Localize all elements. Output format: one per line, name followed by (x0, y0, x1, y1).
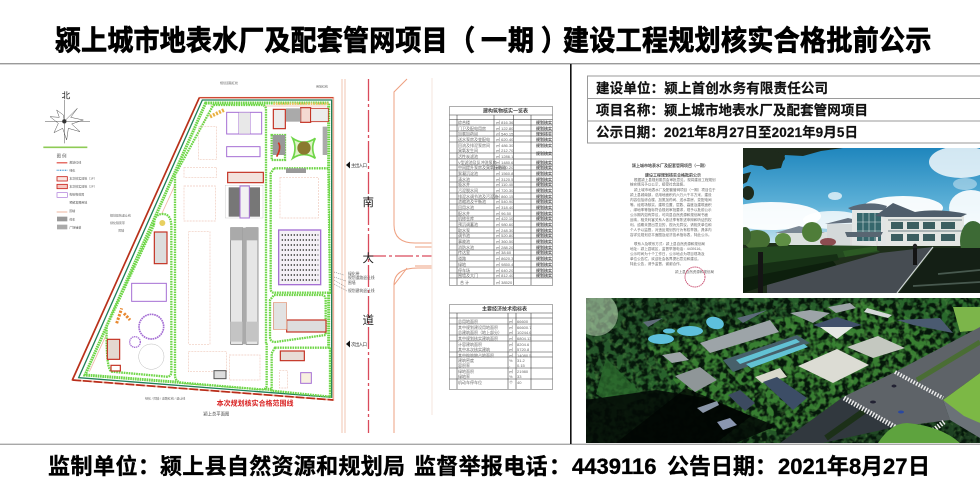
table: technical indicators: ㎡ (509, 318, 513, 324)
compass rose: 北 (62, 90, 71, 100)
plan caption: 颍上总平面图 (203, 411, 229, 418)
panel: road: 道 (362, 313, 374, 327)
table: building list: 规划核实 (536, 130, 552, 136)
table: building list (450, 106, 552, 286)
table rows: 浓缩池及平衡池 (458, 198, 486, 204)
plaza road (767, 247, 933, 293)
legend: 绿化 (69, 168, 75, 173)
table rows: 清水池 (458, 176, 470, 182)
table: building list: ㎡ 860.15 (496, 193, 514, 199)
notice document: 容详见规划总平面图及经济技术指标表，特此公示。 (630, 232, 712, 237)
table rows: 机修仓库 (458, 215, 474, 221)
table rows: 绿地率 (458, 373, 470, 379)
table: building list: ㎡ 486.30 (496, 142, 514, 148)
table: technical indicators: 5720.8 (517, 347, 530, 352)
notice document: 颍上县自然资源和规划局 (675, 269, 714, 274)
notice document: 公示期内如有异议，可向县自然资源和规划局书面 (630, 212, 708, 217)
table rows: 机动车停车位 (458, 379, 482, 385)
table: technical indicators: ㎡ (509, 352, 513, 358)
lawn and mist (574, 292, 618, 336)
table: technical indicators: 8204.6 (517, 342, 530, 347)
table: technical indicators: ㎡ (509, 329, 513, 335)
landscape features (117, 110, 315, 323)
table: technical indicators: 40 (517, 380, 522, 385)
figures (758, 248, 917, 293)
legend: 预留发展用地 (69, 200, 87, 205)
table: building list: 规划核实 (536, 255, 552, 261)
table: technical indicators: ㎡ (509, 346, 513, 352)
intersection and roads (843, 327, 980, 427)
panel: road: 大 (362, 251, 374, 265)
notice document: 个人予以监督，对违反规划的行为有权举报。具体内 (630, 227, 712, 232)
table: building list: ㎡ 96.50 (496, 210, 512, 216)
table: building list: ㎡ 720.30 (496, 187, 514, 193)
site annotations: 用地红线 (316, 83, 328, 88)
grid of filter tanks (282, 235, 318, 280)
table: building list: ㎡ 816.36 (496, 119, 514, 125)
footer: supervision line: ： (549, 454, 571, 479)
site annotations: 绿化 / 围墙 / 道路红线 / 退让线 (145, 395, 185, 400)
buildings (130, 112, 321, 383)
notice document: 根据颍上县规划委员会审批意见，现将建设工程规划 (634, 177, 716, 182)
main building (825, 203, 967, 246)
table: building list: 规划核实 (536, 187, 552, 193)
table: technical indicators: % (509, 374, 513, 379)
table: building list: ㎡ 520.80 (496, 232, 514, 238)
vehicles (870, 384, 904, 414)
main entrance (346, 162, 350, 168)
table: technical indicators: ㎡ (509, 368, 513, 374)
table: technical indicators: % (509, 358, 513, 363)
leader notes: 绿化带 (348, 271, 360, 276)
table: building list: ㎡ 860.20 (496, 164, 514, 170)
table: building list: ㎡ 248.30 (496, 227, 514, 233)
filter beds (723, 335, 810, 372)
notice document: 核实情况予以公示，接受社会监督。 (630, 182, 687, 186)
notice document: 联系人及联系方式：颍上县自然资源和规划局 (634, 241, 705, 246)
table: technical indicators: ㎡ (509, 341, 513, 347)
panel: road: 规划建筑退让线 (348, 288, 375, 293)
table: technical indicators: 31.2 (517, 358, 526, 363)
table rows: 门卫及配电用房 (458, 125, 486, 131)
table: building list: ㎡ 288.20 (496, 244, 514, 250)
footer: supervision line: 年 (827, 454, 849, 479)
table rows: 预沉调蓄池 (458, 221, 478, 227)
site annotations: 绿化隔离带 (110, 220, 125, 225)
frame lines (0, 63, 980, 445)
notice document: 特此公告，请予监督，谢谢合作。 (630, 261, 683, 266)
table: building list: ㎡ 9850.4 (496, 261, 514, 267)
legend: 停车 (69, 216, 75, 221)
legend: 规划红线 (69, 160, 81, 165)
table: building list: ㎡ 8620.3 (496, 255, 514, 261)
table: building list: ㎡ 540.90 (496, 198, 514, 204)
table: technical indicators: 个 (509, 380, 513, 385)
clouds (721, 146, 980, 230)
notice document: 建设工程规划核实合格批前公示 (645, 172, 701, 178)
site annotations: 规划建筑退让线 (110, 213, 131, 218)
table: building list: ㎡ 640.20 (496, 267, 514, 273)
treatment halls (225, 108, 327, 344)
tree canopy (741, 148, 843, 200)
table rows: 加氯加药间 (458, 130, 478, 136)
secondary entrance (346, 340, 350, 348)
table: building list: 规划核实 (536, 181, 552, 187)
table: building list: 规划核实 (536, 267, 552, 273)
table: building list: 规划核实 (536, 204, 552, 210)
site annotations: 围墙 (118, 228, 124, 233)
title: 期 (508, 25, 534, 56)
table rows: 其中规划建设用地面积 (458, 324, 498, 330)
title: 一 (481, 25, 507, 56)
crosswalks (844, 398, 895, 427)
notice document: 等。经现场核实，建筑位置、层数、高度及建筑面积 (630, 202, 712, 207)
panel: road: 主出入口 (351, 162, 367, 169)
table rows: 绿地面积 (458, 368, 474, 374)
notice document: 颍上城市地表水厂及配套管网项目（一期） (632, 162, 708, 168)
table: building list: 规划核实 (536, 249, 552, 255)
table: building list: 规划核实 (536, 227, 552, 233)
foliage texture (586, 298, 980, 443)
project name: 项目名称：颍上城市地表水厂及配套管网项目 (596, 102, 868, 118)
green zones (107, 105, 330, 397)
table title: 主要经济技术指标表 (482, 306, 527, 312)
table rows: 絮凝沉淀池 (458, 170, 478, 176)
table rows: 吸水井 (458, 181, 470, 187)
panel: road: 围墙 (348, 280, 356, 285)
footer: supervision line: 日 (908, 454, 930, 479)
table rows: 总用地面积 (458, 318, 478, 324)
panel: road: 次出入口 (351, 341, 367, 348)
table: building list: 规划核实 (536, 125, 552, 131)
notice date: 公示日期：2021年8月27日至2021年9月5日 (596, 124, 858, 140)
trees and hedges (739, 221, 980, 293)
table: building list: ㎡ 1560.8 (496, 170, 514, 176)
pools (648, 315, 725, 344)
table: building list: 规划核实 (536, 150, 552, 156)
table: building list: ㎡ 3120.5 (496, 176, 514, 182)
grey roofs (643, 303, 892, 392)
table rows: 其中构筑物占地面积 (458, 352, 494, 358)
road name: 南 (362, 195, 374, 209)
notice document: 颍上城市地表水厂及配套管网项目（一期）项目位于 (634, 187, 716, 192)
footer: supervision line: ： (138, 454, 160, 479)
table rows: 传达室 (458, 249, 470, 255)
table rows: V型滤池及反冲洗泵房 (458, 159, 497, 165)
table: building list: 规划核实 (536, 272, 552, 278)
compass rose (43, 90, 90, 147)
table: technical indicators (450, 304, 552, 390)
table rows: 调节池 (458, 232, 470, 238)
notice document: 公示时间为十个工作日，公示地点为项目现场及 (630, 251, 705, 256)
table: building list: ㎡ 360.50 (496, 238, 514, 244)
footer: supervision line: 27 (883, 454, 907, 479)
panel: road: 规划道路退让线 (348, 275, 375, 280)
table rows: 总建筑面积（地上部分） (458, 329, 502, 335)
table: building list: 规划核实 (536, 193, 552, 199)
table: building list: 规划核实 (536, 142, 552, 148)
table: technical indicators: 66600.7 (517, 325, 532, 330)
builder: 建设单位：颍上首创水务有限责任公司 (596, 80, 828, 96)
notice document: 颍上县城南部，总用地面积约六万六千平方米，建设 (630, 192, 712, 197)
legend: 图 例 (57, 153, 67, 160)
table rows: 事故池 (458, 238, 470, 244)
table rows: 建筑密度 (458, 357, 474, 363)
notice document: 单位公告栏，欢迎社会各界提出意见和建议。 (630, 256, 701, 261)
table: building list: 规划核实 (536, 176, 552, 182)
table: building list: ㎡ 812.40 (496, 272, 514, 278)
table rows: 计容建筑面积 (458, 341, 482, 347)
legend: 围墙 (69, 208, 75, 213)
table rows: 取水泵 (458, 227, 470, 233)
table: building list: ㎡ 980.60 (496, 221, 514, 227)
footer: supervision line: 公告日期 (667, 454, 755, 479)
table: building list: ㎡ 212.70 (496, 147, 514, 153)
table: building list: 规划核实 (536, 232, 552, 238)
table rows: 回用水池 (458, 204, 474, 210)
notice document: 反映，相关利害关系人依法享有陈述申辩和听证的权 (630, 217, 712, 222)
table: building list: 规划核实 (536, 198, 552, 204)
legend: 构筑物范围 (69, 191, 84, 196)
table rows: 合 计 (460, 279, 469, 285)
title: （ (449, 25, 475, 56)
red caption: 本次规划核实合格范围线 (217, 398, 294, 407)
far wing (775, 226, 827, 245)
site boundary (72, 98, 333, 400)
footer: supervision line: ： (755, 454, 777, 479)
red seal (685, 267, 705, 287)
table rows: 送水泵房及变配电 (458, 136, 490, 142)
title: ） (541, 25, 567, 56)
table: building list: 规划核实 (536, 136, 552, 142)
table rows: 中间提升泵房及臭氧接触池 (458, 164, 506, 170)
table rows: 消防水池 (458, 244, 474, 250)
table rows: 绿地 (458, 261, 466, 267)
table: building list: 规划核实 (536, 261, 552, 267)
footer: supervision line: 4439116 (572, 454, 656, 479)
panel: site plan (43, 80, 333, 418)
legend: 本次核实建筑（1F） (69, 175, 97, 180)
table: building list: ㎡ 318.40 (496, 204, 514, 210)
photo: aerial rendering of the plant (586, 298, 980, 443)
table rows: 容积率 (458, 362, 470, 368)
panel: road (334, 78, 432, 433)
site annotations (110, 80, 328, 400)
table rows: 配水井 (458, 210, 470, 216)
table: building list: ㎡ 110.40 (496, 181, 514, 187)
table: building list: ㎡ 38.60 (496, 249, 512, 255)
panel: project info (587, 76, 980, 143)
footer: supervision line: 监督举报电话 (414, 454, 548, 479)
table: technical indicators: ㎡ (509, 324, 513, 330)
title (55, 24, 932, 56)
table: building list: ㎡ 422.10 (496, 215, 514, 221)
table rows: 污泥脱水间 (458, 187, 478, 193)
table: building list: ㎡ 38520 (496, 279, 513, 285)
ground (743, 243, 980, 293)
footer: supervision line: 月 (861, 454, 883, 479)
title: 颍上城市地表水厂及配套管网项目 (55, 24, 448, 56)
dark corner shade (586, 390, 776, 443)
light roofs (798, 349, 869, 383)
table: technical indicators: 33 (517, 374, 522, 379)
notice document (625, 150, 740, 292)
table rows: 其中规划核实建筑面积 (458, 335, 498, 341)
footer: supervision line: 颍上县自然资源和规划局 (160, 454, 405, 479)
footer: supervision line: 监制单位 (48, 454, 138, 479)
notice document: 利。逾期未提出意见的，视为无异议。请相关单位和 (630, 222, 712, 227)
notice document: 、绿地率等指标符合规划审批要求，现予以批前公示 (630, 207, 712, 212)
table: building list: 规划核实 (536, 159, 552, 165)
table: technical indicators: 66600 (517, 319, 529, 324)
table rows: 排泥水调节池及污泥池 (458, 193, 498, 199)
table: technical indicators: 0.15 (517, 363, 526, 368)
table: building list: 规划核实 (536, 221, 552, 227)
table: technical indicators: ㎡ (509, 335, 513, 341)
photo: office building rendering (743, 148, 980, 293)
table: technical indicators: 6804.13 (517, 336, 532, 341)
table rows: 其中本次核实建筑 (458, 346, 490, 352)
table: building list: 规划核实 (536, 164, 552, 170)
central lawn (646, 298, 956, 433)
title: 建设工程规划核实合格批前公示 (563, 25, 932, 56)
table: building list: 规划核实 (536, 170, 552, 176)
table: building list: 规划核实 (536, 238, 552, 244)
notice document: 内容包括综合楼、加氯加药间、送水泵房、变配电间 (630, 197, 712, 202)
plots (184, 127, 318, 388)
table: building list: ㎡ 620.40 (496, 136, 514, 142)
corner lawns (943, 373, 980, 423)
footer: supervision line: 8 (849, 454, 861, 479)
table: technical indicators: 21980 (517, 369, 529, 374)
legend: 本次核实建筑（2F） (69, 183, 97, 188)
table: building list: ㎡ 1286.1 (496, 153, 514, 159)
table: building list: ㎡ 122.80 (496, 125, 514, 131)
footer: supervision line: 2021 (778, 454, 827, 479)
legend (57, 153, 97, 229)
table: technical indicators: 14080.5 (517, 353, 532, 358)
table rows: 活性炭滤池 (458, 153, 478, 159)
table: technical indicators: - (509, 363, 511, 368)
notice document: 地址：颍上县城区，监督举报电话：4439116。 (630, 246, 704, 251)
table: building list: ㎡ 540.15 (496, 130, 514, 136)
footer: supervision line (48, 454, 930, 479)
table title: 建构筑物核实一览表 (483, 108, 528, 114)
table: technical indicators: 10244.6 (517, 330, 532, 335)
table: building list: 规划核实 (536, 210, 552, 216)
table rows: 围墙及大门 (458, 272, 478, 278)
table: building list: 规划核实 (536, 119, 552, 125)
table rows: 停车场 (458, 267, 470, 273)
table: building list: 规划核实 (536, 244, 552, 250)
table rows: 道路 (458, 255, 466, 261)
table rows: 回流及排泥泵房间 (458, 142, 490, 148)
table rows: 综合楼 (458, 119, 470, 125)
legend: 广场铺装 (69, 224, 81, 229)
table: building list: ㎡ 1480.6 (496, 159, 514, 165)
site annotations: 规划道路红线 (220, 80, 238, 85)
table rows: 臭氧发生间 (458, 147, 478, 153)
table: building list: 规划核实 (536, 215, 552, 221)
